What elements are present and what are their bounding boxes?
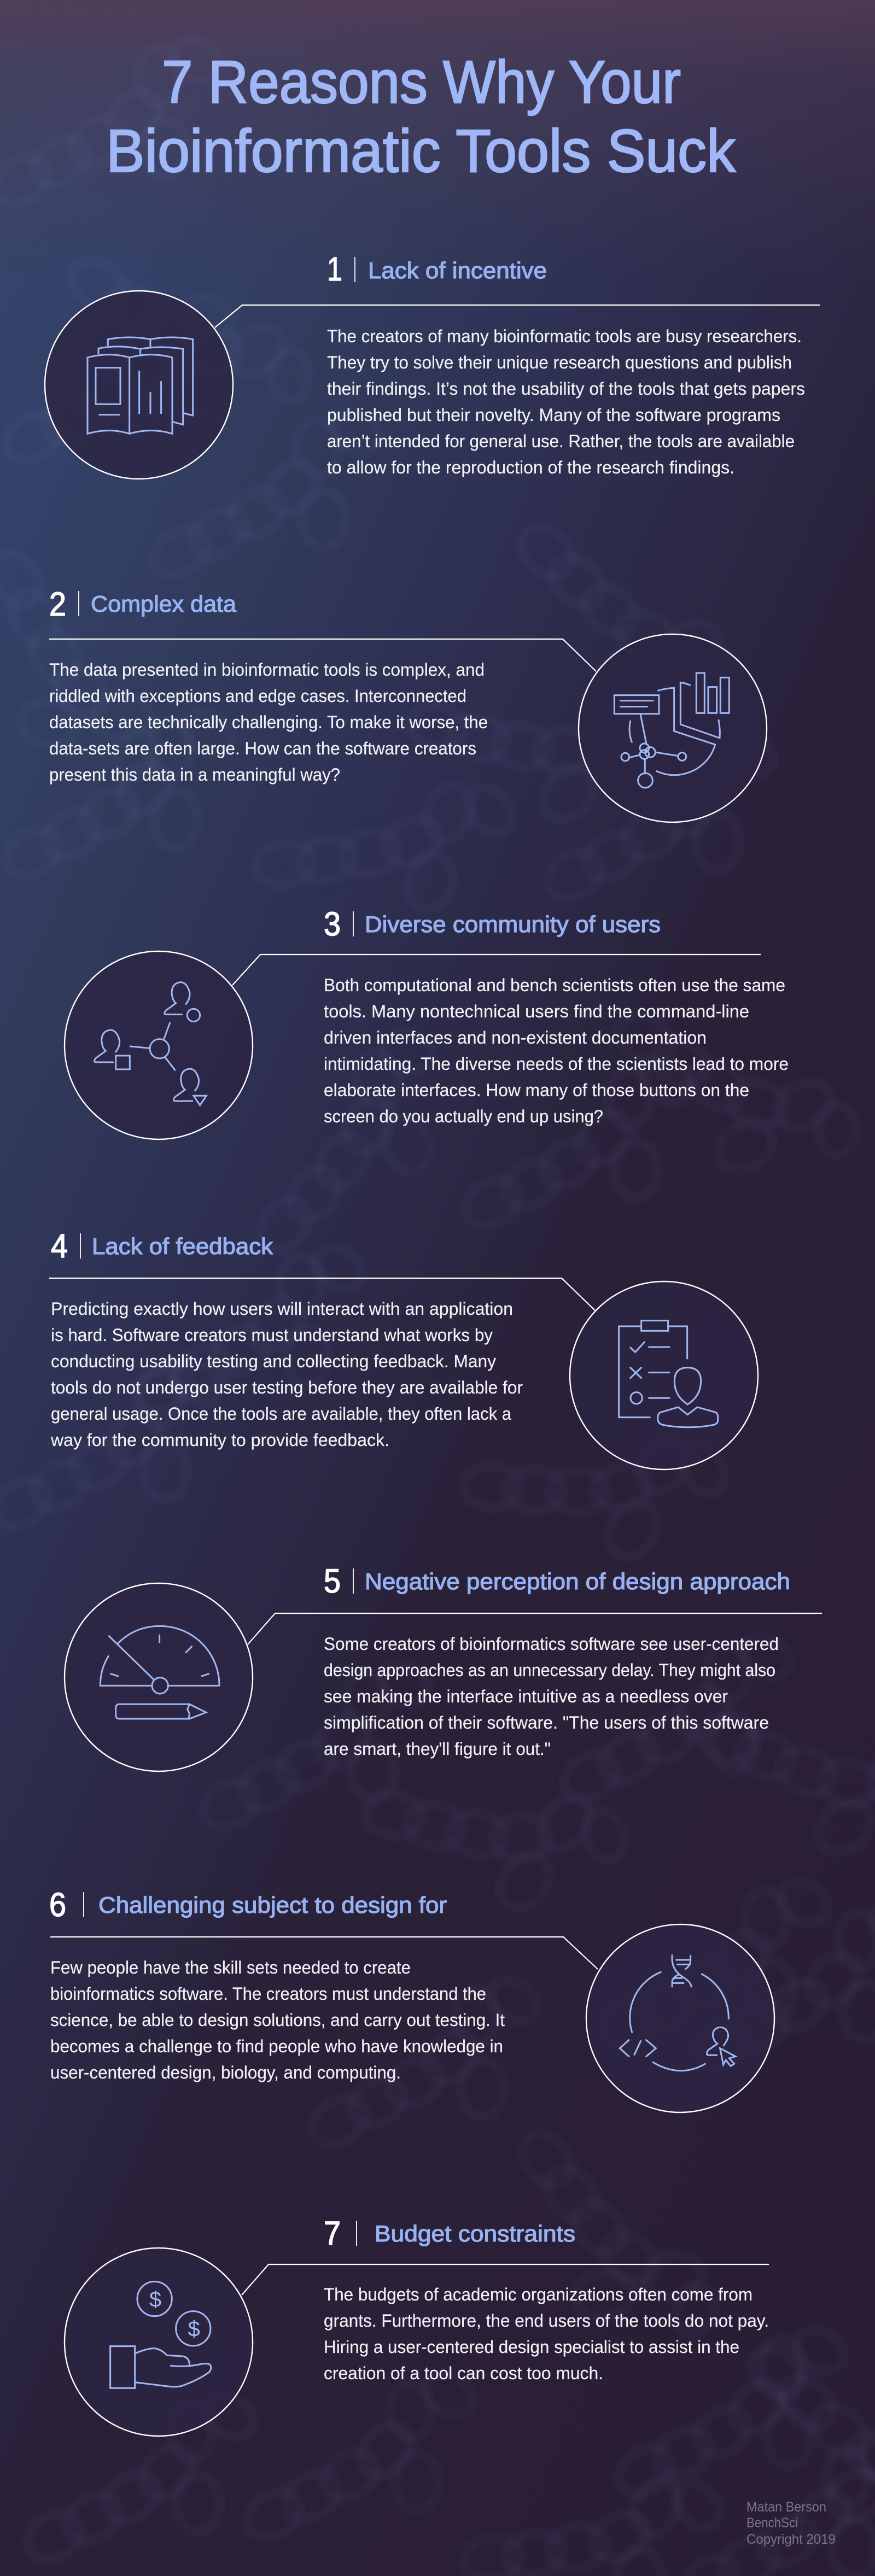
text block: Hiring a user-centered design specialist to assist in the [324, 2337, 739, 2357]
text block: design approaches as an unnecessary delay. They might also [324, 1660, 775, 1680]
text block [327, 326, 805, 477]
text block: aren’t intended for general use. Rather, the tools are available [327, 431, 795, 451]
text block: elaborate interfaces. How many of those buttons on the [324, 1080, 749, 1100]
text block: data-sets are often large. How can the software creators [49, 739, 476, 758]
text block: user-centered design, biology, and computing. [50, 2063, 401, 2082]
text block [50, 1299, 523, 1450]
text block: their findings. It’s not the usability of the tools that gets papers [327, 379, 805, 399]
number: 6 [49, 1886, 66, 1923]
icon: hand and coins [110, 2281, 211, 2388]
heading: Lack of incentive [368, 257, 547, 283]
number: 1 [327, 250, 342, 288]
connector line [49, 639, 596, 671]
heading: Negative perception of design approach [365, 1568, 790, 1594]
connector line [49, 1278, 595, 1310]
text block: Few people have the skill sets needed to create [50, 1958, 411, 1977]
text block: Predicting exactly how users will interact with an application [51, 1299, 513, 1319]
text block: bioinformatics software. The creators must understand the [50, 1984, 486, 2004]
panel: reason 6 [49, 1886, 774, 2112]
text block [50, 1958, 505, 2082]
text block: conducting usability testing and collecting feedback. Many [51, 1351, 497, 1371]
text block: The data presented in bioinformatic tools is complex, and [49, 660, 485, 680]
text block: The budgets of academic organizations often come from [324, 2285, 752, 2304]
icon circle [570, 1281, 758, 1470]
icon: hand and coins: $ [188, 2317, 200, 2341]
title [106, 49, 736, 185]
heading: Complex data [91, 591, 237, 617]
panel: reason 3 [65, 905, 789, 1139]
text block: simplification of their software. "The users of this software [324, 1713, 769, 1732]
connector line [242, 2264, 769, 2295]
number: 2 [49, 586, 66, 623]
text block: published but their novelty. Many of the software programs [327, 405, 780, 425]
text block: creation of a tool can cost too much. [324, 2363, 603, 2383]
text block [49, 660, 488, 784]
text block: The creators of many bioinformatic tools are busy researchers. [327, 326, 802, 346]
text block: tools. Many nontechnical users find the command-line [324, 1002, 749, 1021]
text block: see making the interface intuitive as a needless over [324, 1687, 728, 1706]
text block: grants. Furthermore, the end users of the tools do not pay. [324, 2311, 769, 2331]
footer credit: Copyright 2019 [746, 2532, 836, 2547]
icon circle [45, 291, 233, 479]
text block: datasets are technically challenging. To make it worse, the [49, 712, 488, 732]
text block: tools do not undergo user testing before they are available for [51, 1378, 523, 1397]
text block: becomes a challenge to find people who have knowledge in [50, 2036, 503, 2056]
text block [324, 1634, 779, 1759]
heading: Challenging subject to design for [98, 1892, 447, 1918]
panel: reason 4 [49, 1227, 758, 1470]
number: 4 [51, 1227, 68, 1264]
footer credit: Matan Berson [746, 2499, 826, 2515]
text block: Both computational and bench scientists often use the same [324, 975, 785, 995]
text block: science, be able to design solutions, and carry out testing. It [50, 2010, 505, 2030]
icon: clipboard and user [619, 1321, 718, 1427]
text block: screen do you actually end up using? [324, 1106, 603, 1126]
icon circle [65, 951, 253, 1139]
connector line [248, 1613, 822, 1644]
connector line [215, 305, 820, 327]
icon: hand and coins: $ [149, 2287, 161, 2311]
connector line [232, 955, 761, 985]
icon circle [65, 1583, 253, 1771]
icon: data, chart and network [614, 673, 729, 788]
icon: open books [88, 337, 193, 434]
text block: intimidating. The diverse needs of the scientists lead to more [324, 1054, 789, 1074]
panel: reason 5 [65, 1562, 822, 1771]
footer credit [746, 2499, 836, 2547]
panel: reason 2 [49, 586, 767, 822]
text block: driven interfaces and non-existent documentation [324, 1028, 707, 1047]
number: 7 [324, 2215, 341, 2252]
icon: gauge and pencil [100, 1626, 219, 1719]
icon circle [586, 1924, 774, 2112]
text block: are smart, they'll figure it out." [324, 1739, 551, 1759]
number: 5 [324, 1562, 341, 1600]
heading: Lack of feedback [92, 1233, 273, 1259]
icon: DNA, code and user cycle [620, 1956, 736, 2071]
text block: to allow for the reproduction of the research findings. [327, 458, 734, 477]
text block: Some creators of bioinformatics software see user-centered [324, 1634, 779, 1654]
text block: They try to solve their unique research questions and publish [327, 353, 792, 372]
text block: present this data in a meaningful way? [49, 765, 340, 784]
heading: Diverse community of users [365, 911, 661, 937]
connector line [50, 1937, 598, 1969]
title: Bioinformatic Tools Suck [106, 118, 736, 185]
panel: reason 1 [45, 250, 820, 479]
icon circle [579, 634, 767, 822]
panel: reason 7 [65, 2215, 769, 2436]
number: 3 [324, 905, 341, 942]
icon circle [65, 2248, 253, 2436]
footer credit: BenchSci [746, 2515, 798, 2531]
title: 7 Reasons Why Your [162, 49, 681, 116]
icon: users network [94, 982, 206, 1105]
heading: Budget constraints [375, 2221, 575, 2246]
text block [324, 2285, 769, 2383]
text block: is hard. Software creators must understand what works by [51, 1325, 493, 1345]
text block [324, 975, 789, 1126]
text block: riddled with exceptions and edge cases. Interconnected [49, 686, 466, 706]
text block: general usage. Once the tools are available, they often lack a [51, 1404, 512, 1424]
text block: way for the community to provide feedback. [50, 1430, 389, 1450]
